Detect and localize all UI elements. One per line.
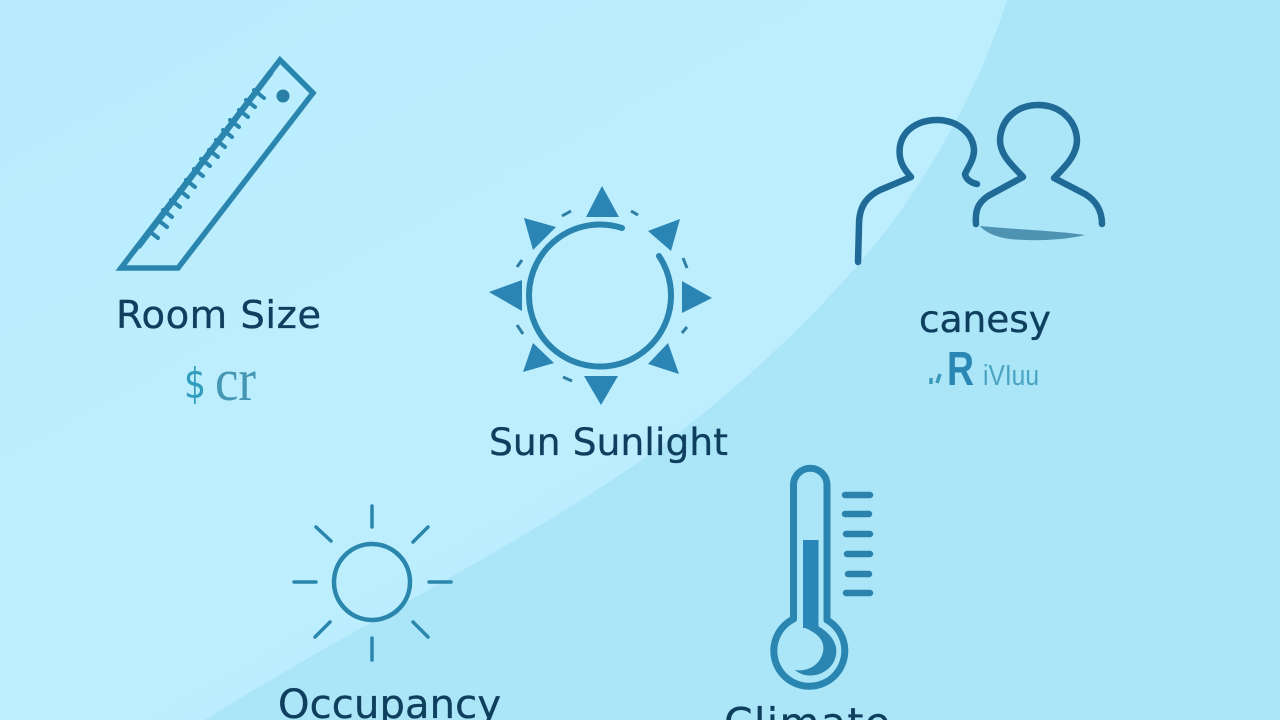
icon: shadow under right person [980,226,1085,240]
text: small label under Room Size: cr [215,347,256,413]
icon: ruler [121,60,313,268]
icon: outline sun [294,506,451,660]
icon: thermometer [774,468,870,686]
text: small label under canesy: R [947,343,974,396]
text: small label under canesy: iVIuu [983,360,1039,392]
icon: two people [858,105,1102,262]
text: small label under Room Size [184,347,256,413]
heading: canesy: canesy [919,297,1051,341]
heading: Room Size: Room Size [116,293,321,338]
heading: Sun Sunlight: Sun Sunlight [489,420,728,464]
icon: sun with triangular rays [489,186,712,405]
text: small label under Room Size: $ [184,359,206,408]
text: small label under canesy [931,343,1039,396]
